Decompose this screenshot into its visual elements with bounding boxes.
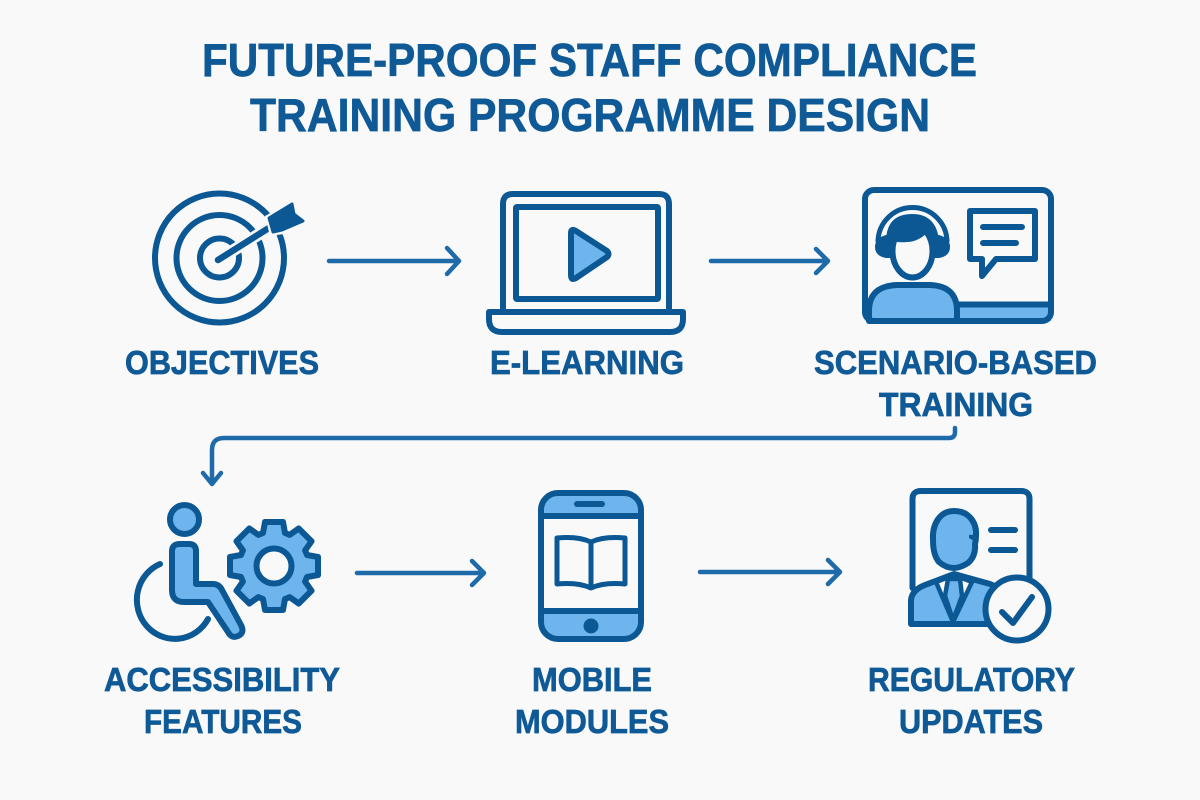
arrow: e-learning to scenario-based training xyxy=(711,249,828,273)
label: e-learning: E-LEARNING xyxy=(490,344,684,381)
label: scenario-based training: SCENARIO-BASED xyxy=(814,344,1097,381)
icon: professional profile with check badge xyxy=(911,491,1048,640)
title: TRAINING PROGRAMME DESIGN xyxy=(250,89,930,141)
label: regulatory updates: REGULATORY xyxy=(868,661,1075,698)
label: accessibility features: ACCESSIBILITY xyxy=(104,661,340,698)
label: accessibility features: FEATURES xyxy=(144,703,302,740)
label: regulatory updates: UPDATES xyxy=(899,703,1043,740)
icon: trainer with headset and speech bubble xyxy=(865,190,1051,321)
arrow: connector to second row xyxy=(203,428,955,484)
icon: laptop with play button xyxy=(489,194,683,332)
icon: phone with open book xyxy=(541,493,641,639)
label: regulatory updates xyxy=(868,661,1075,740)
label: mobile modules xyxy=(515,661,669,740)
icon: target with arrow xyxy=(155,194,307,322)
label: scenario-based training xyxy=(814,344,1097,423)
title: FUTURE-PROOF STAFF COMPLIANCE xyxy=(202,34,977,86)
label: scenario-based training: TRAINING xyxy=(879,386,1033,423)
label: accessibility features xyxy=(104,661,340,740)
arrow: accessibility to mobile modules xyxy=(357,561,484,585)
title xyxy=(202,34,977,141)
label: objectives: OBJECTIVES xyxy=(125,344,319,381)
icon: wheelchair user and gear xyxy=(137,505,318,639)
arrow: mobile modules to regulatory updates xyxy=(700,560,840,584)
label: mobile modules: MODULES xyxy=(515,703,669,740)
arrow: objectives to e-learning xyxy=(329,248,459,274)
label: mobile modules: MOBILE xyxy=(532,661,652,698)
